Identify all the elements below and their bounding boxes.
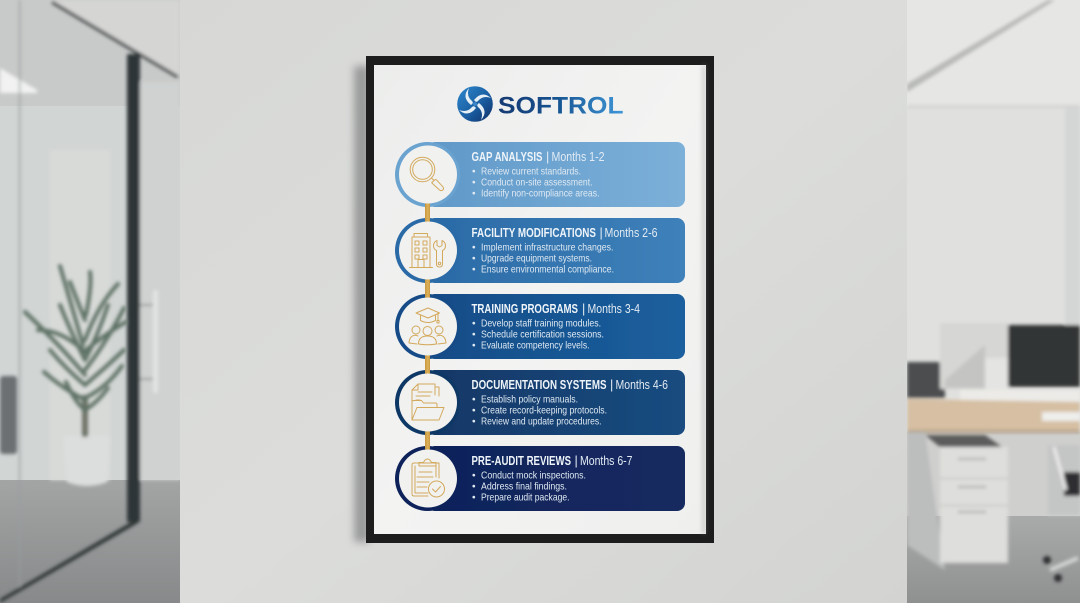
ring xyxy=(395,370,460,435)
timeframe: Months 1-2 xyxy=(552,150,604,164)
step 3: training programs xyxy=(395,294,685,359)
ring xyxy=(395,142,460,207)
bullet list: Review and update procedures. xyxy=(481,416,602,428)
icon: documents and folder xyxy=(412,384,444,420)
separator: | xyxy=(546,150,549,164)
icon disc xyxy=(399,450,457,508)
bullet list xyxy=(472,394,607,428)
bullet list xyxy=(472,166,600,200)
bullet list: Review current standards. xyxy=(481,166,581,178)
bullet list: • xyxy=(472,318,476,330)
heading: FACILITY MODIFICATIONS xyxy=(472,226,596,240)
ring xyxy=(395,218,460,283)
separator: | xyxy=(610,378,613,392)
step 2: facility modifications xyxy=(395,218,685,283)
icon: building and wrench xyxy=(410,234,446,268)
bullet list: Conduct mock inspections. xyxy=(481,470,586,482)
timeframe: Months 3-4 xyxy=(588,302,640,316)
bullet list: • xyxy=(472,330,476,340)
step 4: documentation systems xyxy=(395,370,685,435)
bullet list: • xyxy=(472,166,476,178)
background: office glass partition on the left xyxy=(0,0,180,603)
logo wordmark: SOFTROL xyxy=(498,92,624,120)
background: left room base xyxy=(0,0,180,603)
heading: PRE-AUDIT REVIEWS xyxy=(472,454,571,468)
bullet list: Identify non-compliance areas. xyxy=(481,188,600,200)
timeframe: Months 6-7 xyxy=(580,454,632,468)
bullet list: • xyxy=(472,482,476,492)
bullet list: Evaluate competency levels. xyxy=(481,340,590,352)
bullet list: • xyxy=(472,264,476,276)
icon disc xyxy=(399,374,457,432)
icon disc xyxy=(399,222,457,280)
logo: SOFTROL xyxy=(457,86,624,122)
bullet list: Conduct on-site assessment. xyxy=(481,178,592,188)
background: office room on the right xyxy=(907,0,1080,582)
bullet list: • xyxy=(472,416,476,428)
bullet list xyxy=(472,470,586,504)
band xyxy=(427,370,685,435)
bullet list: • xyxy=(472,492,476,504)
bullet list: Establish policy manuals. xyxy=(481,394,578,406)
step 5: pre-audit reviews xyxy=(395,446,685,511)
gold timeline connectors xyxy=(425,204,430,450)
ring xyxy=(395,294,460,359)
timeframe: Months 2-6 xyxy=(604,226,658,240)
bullet list: Address final findings. xyxy=(481,482,567,492)
bullet list: Create record-keeping protocols. xyxy=(481,406,607,416)
band xyxy=(427,218,685,283)
bullet list: • xyxy=(472,470,476,482)
bullet list: • xyxy=(472,254,476,264)
heading: TRAINING PROGRAMS xyxy=(472,302,578,316)
background: potted plant xyxy=(25,266,126,486)
bullet list: Develop staff training modules. xyxy=(481,318,601,330)
separator: | xyxy=(600,226,603,240)
icon disc xyxy=(399,146,457,204)
icon: magnifying glass xyxy=(410,157,444,191)
bullet list: • xyxy=(472,394,476,406)
ring xyxy=(395,446,460,511)
bullet list: Implement infrastructure changes. xyxy=(481,242,614,254)
bullet list: • xyxy=(472,340,476,352)
heading: DOCUMENTATION SYSTEMS xyxy=(472,378,606,392)
bullet list: Ensure environmental compliance. xyxy=(481,264,614,276)
band xyxy=(427,142,685,207)
band xyxy=(427,446,685,511)
bullet list: • xyxy=(472,178,476,188)
bullet list: • xyxy=(472,406,476,416)
bullet list xyxy=(472,242,614,276)
bullet list xyxy=(472,318,604,352)
bullet list: • xyxy=(472,188,476,200)
poster sheet xyxy=(374,65,706,534)
heading: GAP ANALYSIS xyxy=(472,150,542,164)
poster frame shadow xyxy=(354,66,370,542)
band xyxy=(427,294,685,359)
background: central wall xyxy=(180,0,907,603)
bullet list: • xyxy=(472,242,476,254)
step 1: gap analysis xyxy=(395,142,685,207)
logo swirl icon xyxy=(457,86,493,122)
bullet list: Upgrade equipment systems. xyxy=(481,254,592,264)
separator: | xyxy=(582,302,585,316)
icon disc xyxy=(399,298,457,356)
poster frame xyxy=(366,56,714,543)
bullet list: Schedule certification sessions. xyxy=(481,330,604,340)
background: right room base xyxy=(907,0,1080,603)
icon: clipboard with check xyxy=(412,459,444,497)
timeframe: Months 4-6 xyxy=(616,378,668,392)
separator: | xyxy=(574,454,578,468)
icon: graduate cap and people xyxy=(409,308,446,345)
bullet list: Prepare audit package. xyxy=(481,492,570,504)
